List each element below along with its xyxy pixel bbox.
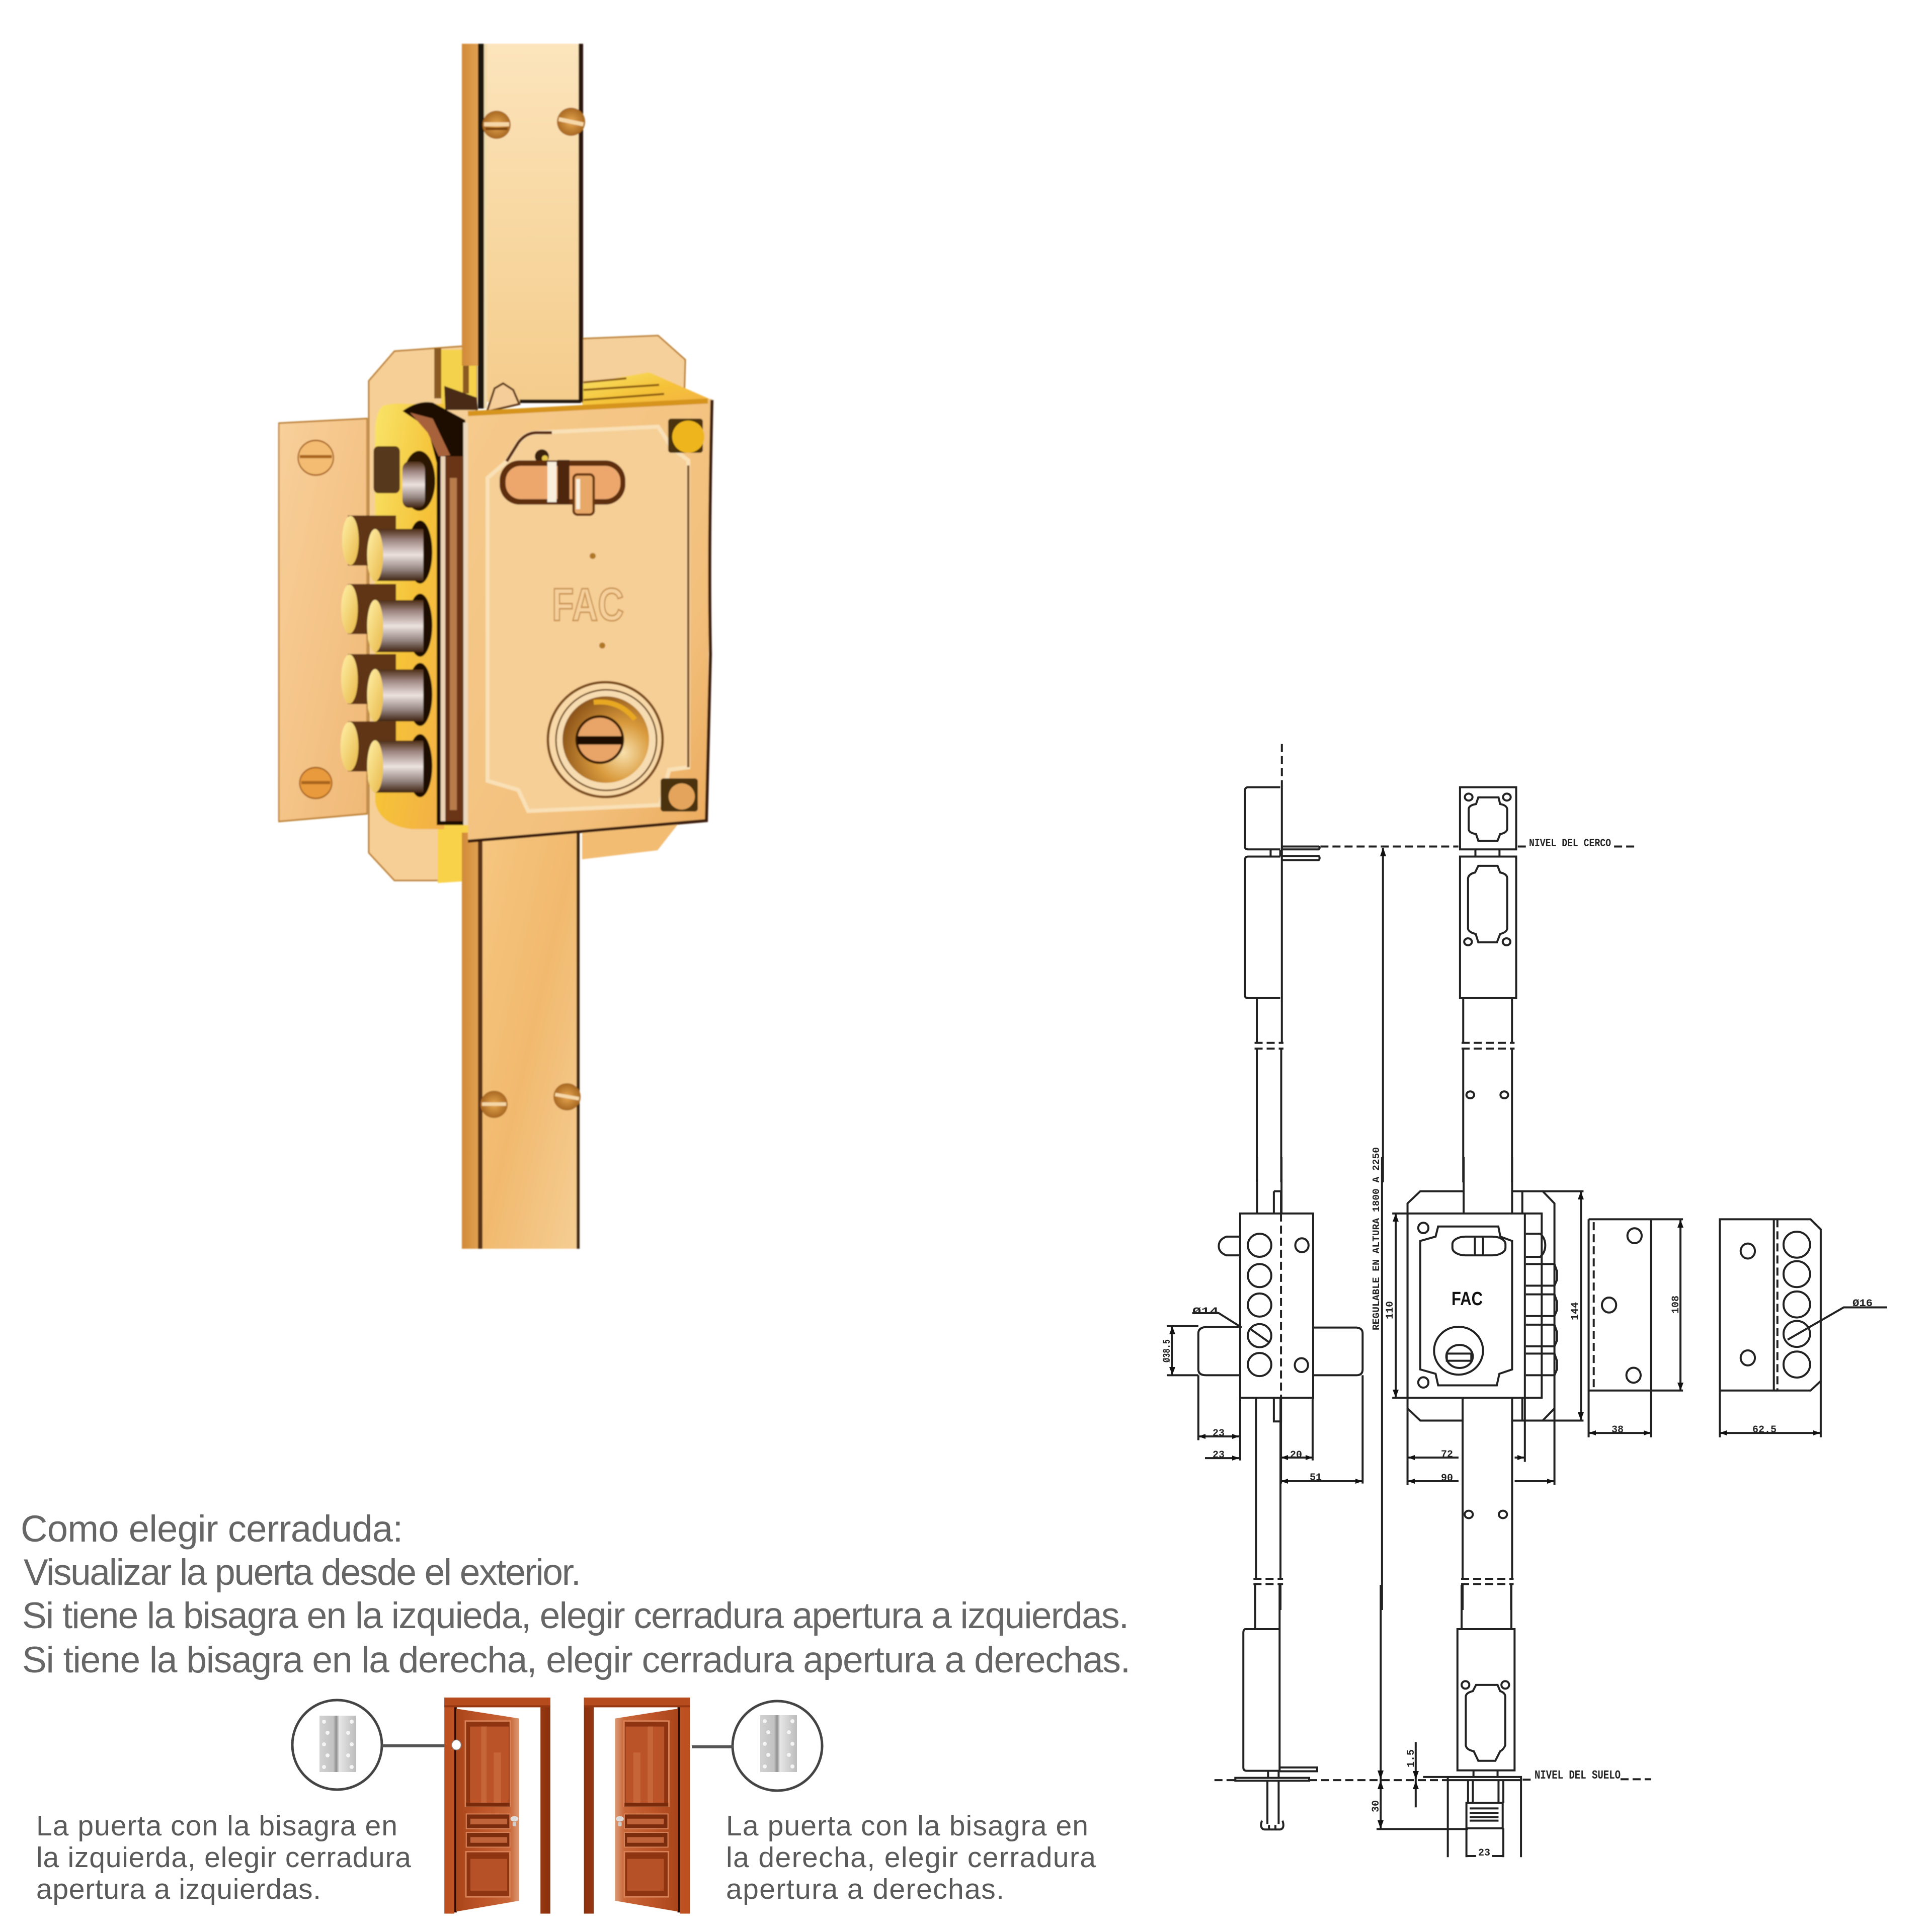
lower vertical bar — [462, 833, 580, 1249]
lock side plate and bolts — [279, 404, 444, 829]
dimension values: Ø14 — [1192, 1306, 1219, 1318]
caption: left hinge door: apertura a izquierdas. — [36, 1873, 321, 1905]
dimension values: 1.5 — [1406, 1749, 1417, 1767]
lock slide latch — [500, 449, 625, 515]
icon: left hinge callout — [292, 1700, 450, 1790]
lock case front — [468, 399, 712, 841]
dimension values: 110 — [1385, 1301, 1396, 1319]
caption: left hinge door: la izquierda, elegir cerradura — [36, 1841, 411, 1874]
label: adjustable height: REGULABLE EN ALTURA 1800 A 2250 — [1371, 1147, 1382, 1330]
dimension values: 23 — [1478, 1847, 1490, 1859]
caption: right hinge door — [726, 1810, 1096, 1905]
line: right hinge: Si tiene la bisagra en la derecha, elegir cerradura apertura a derechas. — [22, 1640, 1131, 1680]
dimension values: Ø16 — [1853, 1298, 1873, 1310]
side edge strips and top bracket — [403, 402, 468, 825]
instructions text — [21, 1508, 1131, 1680]
line: view from exterior: Visualizar la puerta desde el exterior. — [24, 1552, 581, 1593]
line: left hinge: Si tiene la bisagra en la izquieda, elegir cerradura apertura a izquierdas. — [22, 1595, 1129, 1636]
dimension values: 72 — [1441, 1449, 1453, 1461]
upper vertical bar — [462, 44, 583, 409]
latch bracket under bar — [444, 383, 519, 412]
drawing dimension arrows — [1169, 847, 1820, 1829]
label: NIVEL DEL SUELO: NIVEL DEL SUELO — [1535, 1769, 1621, 1783]
dimension values: 30 — [1371, 1800, 1382, 1812]
drawing labels — [1162, 837, 1873, 1859]
technical drawing: side and front elevations, top section — [1245, 744, 1637, 1182]
corner screw: bottom — [661, 778, 698, 812]
dimension values: 20 — [1290, 1450, 1302, 1461]
dimension values: 108 — [1670, 1296, 1682, 1314]
dimension values: 51 — [1310, 1472, 1322, 1484]
lock cylinder — [548, 682, 663, 797]
technical drawing: floor level section — [1215, 1585, 1651, 1857]
screw: lower bar left — [480, 1091, 508, 1118]
dimension values — [1162, 1296, 1873, 1859]
icon: right hinge callout — [692, 1701, 822, 1791]
screw: lower bar right — [553, 1083, 581, 1110]
caption: left hinge door — [36, 1810, 411, 1905]
dimension values: Ø38.5 — [1162, 1339, 1173, 1362]
label: brand on drawing: FAC — [1452, 1289, 1483, 1310]
dimension values: 23 — [1213, 1450, 1225, 1461]
embossed brand text: FAC — [552, 579, 624, 630]
left door illustration — [444, 1698, 550, 1914]
dimension values: 38 — [1612, 1424, 1624, 1436]
lock screw holes — [590, 553, 605, 649]
corner screw: top — [668, 419, 704, 453]
caption: right hinge door: La puerta con la bisagra en — [726, 1810, 1088, 1842]
screw: upper bar left — [482, 111, 511, 139]
caption: right hinge door: la derecha, elegir cerradura — [726, 1841, 1096, 1874]
caption: right hinge door: apertura a derechas. — [726, 1873, 1004, 1905]
dimension values: 144 — [1570, 1302, 1581, 1320]
dimension values: 90 — [1441, 1473, 1453, 1484]
photo: gold multipoint lock — [279, 44, 712, 1249]
label: NIVEL DEL CERCO: NIVEL DEL CERCO — [1529, 837, 1611, 850]
screw: upper bar right — [557, 108, 585, 136]
dimension values: 62.5 — [1752, 1424, 1777, 1436]
caption: left hinge door: La puerta con la bisagra en — [36, 1810, 397, 1842]
technical drawing: lock body views with dimensions — [1167, 1157, 1887, 1610]
dimension values: 23 — [1213, 1428, 1225, 1439]
right door illustration — [584, 1698, 690, 1914]
lock back plates — [369, 336, 712, 883]
heading: how to choose: Como elegir cerraduda: — [21, 1508, 403, 1550]
